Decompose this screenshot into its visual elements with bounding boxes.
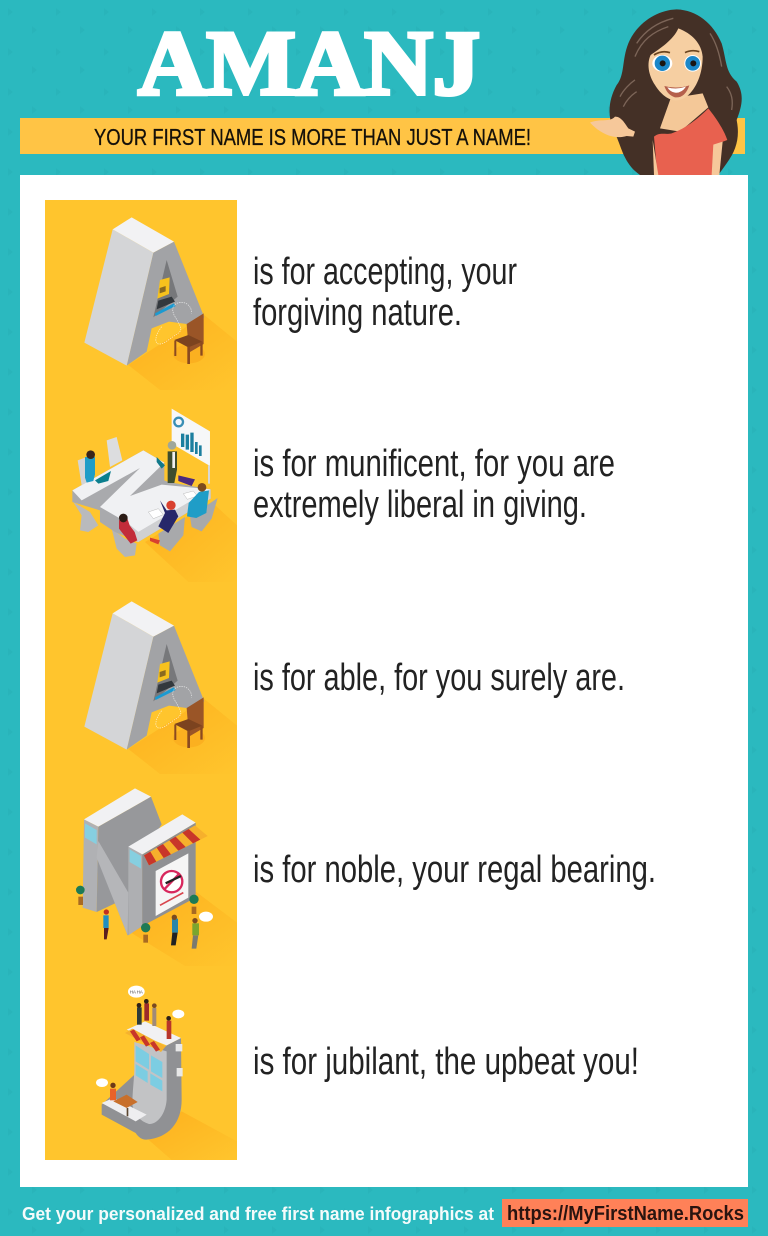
row 5 text: is for jubilant, the upbeat you! (253, 1041, 639, 1083)
desk and person (113, 1095, 138, 1108)
neck and chest (660, 93, 708, 132)
eyes (652, 51, 701, 72)
hair (610, 9, 742, 175)
row 1 text: is for accepting, your (253, 251, 517, 293)
row 5 icon: letter J building: HA HA (130, 989, 143, 994)
row 1 icon: letter A (84, 217, 237, 390)
shirt (654, 108, 727, 175)
yellow illustration column (45, 200, 237, 1160)
rooftop people (137, 1007, 142, 1025)
title: AMANJ (138, 12, 480, 114)
main white panel (20, 175, 748, 1187)
row 3 icon: letter A (84, 601, 237, 774)
row 3 text: is for able, for you surely are. (253, 657, 625, 699)
table letter (72, 450, 211, 542)
row 1 text (253, 251, 517, 334)
footer link badge: https://MyFirstName.Rocks (507, 1203, 744, 1225)
row 2 text (253, 443, 615, 526)
people (103, 909, 213, 949)
row 4 text: is for noble, your regal bearing. (253, 849, 656, 891)
plants (76, 886, 199, 943)
people (85, 457, 95, 483)
awning (144, 825, 208, 865)
subtitle banner: YOUR FIRST NAME IS MORE THAN JUST A NAME! (94, 124, 531, 150)
smile (664, 85, 689, 97)
row 2 icon: letter M meeting table (72, 409, 237, 582)
row 1 text: forgiving nature. (253, 292, 462, 334)
no smoking sign (156, 853, 188, 916)
character illustration (590, 9, 742, 175)
whiteboard (172, 409, 210, 466)
face (649, 28, 703, 100)
row 5 icon: letter J building (96, 986, 237, 1160)
row 4 icon: letter N shop (76, 788, 237, 966)
hand (590, 117, 635, 137)
subtitle banner (20, 118, 745, 154)
footer text: Get your personalized and free first name infographics at (22, 1204, 494, 1224)
row 2 text: extremely liberal in giving. (253, 484, 587, 526)
row 2 text: is for munificent, for you are (253, 443, 615, 485)
chairs (107, 437, 122, 467)
